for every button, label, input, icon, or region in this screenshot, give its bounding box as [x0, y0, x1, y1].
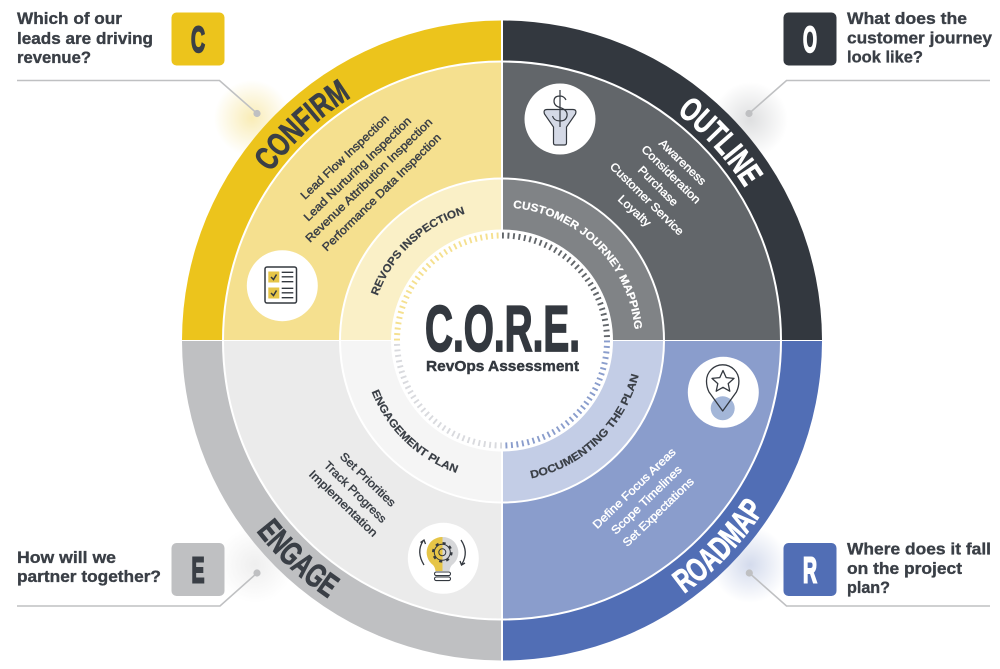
callout: outline: [745, 9, 993, 117]
callout: outline: look like?: [847, 48, 923, 66]
list: outline items: Consideration: [639, 144, 702, 206]
inner label: revops inspection: REVOPS INSPECTION: [370, 206, 465, 296]
callout: outline: customer journey: [847, 28, 993, 48]
icon: lightbulb with gear: [408, 523, 479, 594]
callout: outline: O: [803, 19, 817, 60]
callout: engage: [17, 543, 261, 606]
inner label: documenting the plan: DOCUMENTING THE PLAN: [530, 374, 639, 478]
list: roadmap items: Scope Timelines: [609, 464, 685, 537]
callout: engage: partner together?: [17, 567, 161, 586]
tick ring: [397, 236, 607, 446]
glow: outline callout: [712, 82, 788, 158]
inner label: customer journey mapping: CUSTOMER JOURNEY MAPPING: [514, 200, 642, 329]
glow: engage callout: [217, 527, 293, 603]
callout: outline: What does the: [847, 9, 967, 28]
list: confirm items: Revenue Attribution Inspection: [304, 116, 435, 245]
list: engage items: [306, 451, 398, 540]
callout: roadmap: on the project: [847, 559, 962, 578]
ring label: engage: ENGAGE: [256, 518, 341, 598]
callout: confirm: [17, 9, 261, 117]
center title: C.O.R.E.: [425, 292, 580, 365]
list: confirm items: Lead Nurturing Inspection: [302, 115, 414, 224]
callout: roadmap: [746, 540, 991, 606]
list: outline items: Awareness: [656, 138, 708, 188]
ring label: roadmap: ROADMAP: [671, 498, 760, 594]
list: roadmap items: Set Expectations: [621, 476, 697, 549]
ring label: outline: OUTLINE: [680, 98, 764, 188]
quadrant: outline: [503, 20, 822, 340]
quadrant: confirm: [182, 20, 501, 340]
list: confirm items: [299, 113, 444, 254]
callout: roadmap: plan?: [847, 578, 890, 597]
icon: dollar funnel: [524, 84, 596, 154]
callout: roadmap: R: [803, 550, 817, 590]
quadrant: roadmap: [503, 341, 822, 660]
inner label: engagement plan: ENGAGEMENT PLAN: [372, 389, 458, 473]
icon: checklist: [247, 250, 318, 321]
list: roadmap items: [591, 446, 697, 549]
callout: engage: E: [192, 550, 204, 590]
quadrant: engage: [182, 341, 501, 660]
list: confirm items: Performance Data Inspection: [320, 132, 444, 254]
center disc: [391, 230, 613, 452]
list: engage items: Set Priorities: [337, 451, 398, 510]
list: outline items: Customer Service: [607, 161, 686, 238]
callout: confirm: leads are driving: [17, 29, 153, 48]
callout: engage: How will we: [17, 548, 116, 567]
ring label: confirm: CONFIRM: [256, 78, 350, 168]
list: roadmap items: Define Focus Areas: [591, 446, 679, 531]
list: outline items: [607, 138, 708, 238]
callout: confirm: C: [191, 19, 205, 60]
list: outline items: Loyalty: [615, 193, 653, 230]
list: outline items: Purchase: [635, 164, 680, 209]
glow: confirm callout: [214, 80, 290, 156]
callout: confirm: revenue?: [17, 48, 91, 67]
icon: map pin with star: [688, 357, 759, 428]
glow: roadmap callout: [712, 527, 788, 603]
callout: roadmap: Where does it fall: [847, 540, 991, 558]
center subtitle: RevOps Assessment: [426, 359, 579, 375]
list: engage items: Implementation: [306, 469, 379, 540]
list: engage items: Track Progress: [321, 460, 388, 526]
list: confirm items: Lead Flow Inspection: [299, 113, 392, 202]
callout: confirm: Which of our: [17, 9, 122, 28]
